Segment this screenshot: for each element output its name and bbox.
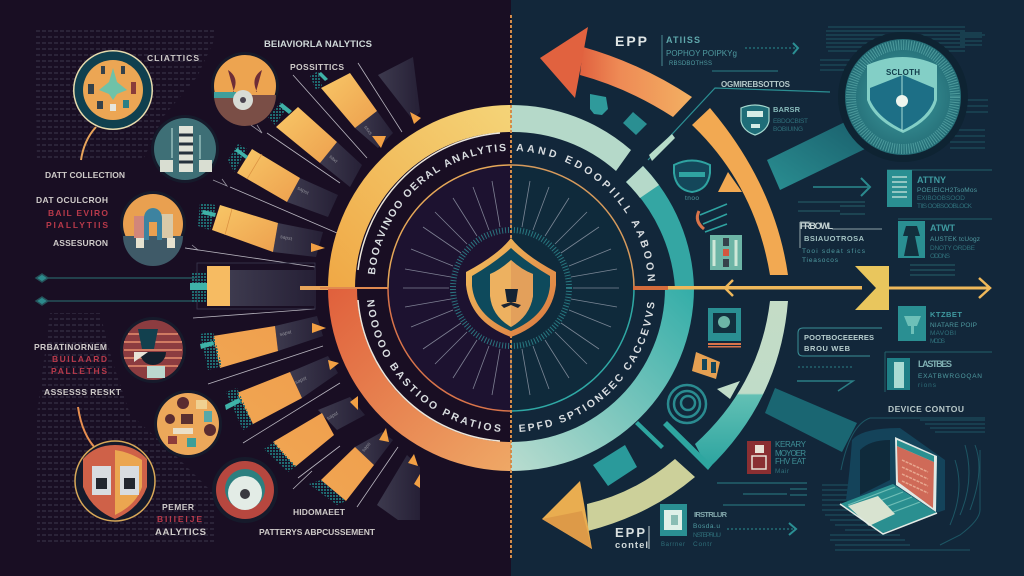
- info card: ktzbet: [898, 306, 977, 345]
- bar: lower 1: [200, 316, 326, 370]
- label block: risk assessment: BUILAARD: [52, 354, 107, 364]
- info card: red: [747, 440, 807, 475]
- label block: data analytics: ASSESURON: [53, 238, 108, 248]
- info card: attny: ATTNY: [917, 175, 946, 185]
- info card: attny: TIIS OOBSOOBLOCK: [917, 203, 973, 210]
- text box: browser: [798, 328, 882, 356]
- badge icon: [741, 105, 769, 135]
- label block: data analytics: [36, 195, 108, 248]
- background left half: [0, 0, 511, 576]
- horizontal ring dividers: [320, 287, 668, 289]
- circle: behavior: [211, 52, 279, 126]
- ring segment top left: [328, 105, 511, 288]
- arc: right pale to teal: [695, 301, 788, 469]
- info card: attny: [887, 170, 992, 210]
- small rule lines: [910, 265, 955, 275]
- left horizontal connector lines: [36, 274, 195, 305]
- bar: upper 1: [310, 71, 393, 148]
- label: hidden pattern: [259, 507, 376, 537]
- info card: lastbes: rions: [918, 382, 937, 389]
- left labels: [34, 39, 376, 538]
- text block: badge: BOBIUING: [773, 126, 803, 133]
- lines lower: [717, 483, 807, 505]
- bar: lower panel: [377, 454, 420, 520]
- ring segment bottom right: [511, 288, 694, 471]
- label block: analytics: AALYTICS: [155, 527, 206, 538]
- text block: install: NSTEPRUU: [693, 532, 721, 539]
- badge label: SCLOTH: [886, 68, 920, 77]
- bar: upper 3: sapst: [296, 185, 310, 197]
- bar: lower 1: sapst: [279, 329, 293, 338]
- tick ring: [453, 230, 569, 346]
- heading: device control: DEVICE CONTOU: [888, 404, 964, 414]
- label block: data analytics: PIALLYTIIS: [46, 220, 108, 230]
- icon: cup: tnoo: [685, 195, 699, 202]
- info card: atwt: ODDNS: [930, 253, 951, 260]
- fan separator lines: [185, 63, 402, 507]
- inner disc left: [388, 165, 511, 411]
- info card: ktzbet: MAVOBI: [930, 330, 956, 337]
- caption: response: EPFD SPTIONEEC CACCEVVS: [519, 302, 654, 432]
- small icons along inner arc: [590, 94, 742, 486]
- notch arrow pale: [717, 381, 740, 399]
- heading: EPP top: EPP: [615, 33, 647, 49]
- icon: document: [660, 504, 687, 548]
- circle: objects: [154, 390, 222, 458]
- arrow bar bottom: [765, 388, 857, 452]
- icon: chip two: [623, 112, 647, 135]
- heading: EPP bottom: [615, 525, 649, 551]
- policy block: POPHOY POIPKYg: [666, 49, 737, 58]
- info card: atwt: AUSTEK tcUogz: [930, 236, 980, 243]
- arrow bar top: [767, 122, 867, 190]
- bar: horizontal: [190, 263, 330, 309]
- bar: lower 3: [264, 396, 365, 472]
- caption: endpoint: AAND EDOOPIILL AABOON: [516, 144, 656, 281]
- info card: ktzbet: NIATARE POIP: [930, 322, 977, 329]
- arc notch arrow orange: [718, 172, 742, 192]
- ring pale cap: [626, 166, 659, 198]
- icon: panel: [710, 235, 742, 270]
- info card: lastbes: [885, 352, 992, 392]
- text block: firewall: FRBOWL: [800, 221, 834, 231]
- text box: browser: POOTBOCEEERES: [804, 333, 874, 342]
- teal accent lines near ring: [635, 88, 830, 470]
- label block: risk assessment: PRBATINORNEM: [34, 342, 107, 352]
- label block: risk assessment: PALLETHS: [51, 366, 107, 376]
- info card: red: KERARY: [775, 440, 807, 449]
- label: hidden pattern: HIDOMAEET: [293, 507, 346, 517]
- text block: firewall: Tooi sdeat sfics: [802, 248, 866, 255]
- caption: behavioral analytics: BOOAVINOO OERAL ANALYTIS: [368, 144, 506, 274]
- info card: red: Mair: [775, 468, 790, 475]
- label block: risk assessment: ASSESSS RESKT: [44, 387, 122, 397]
- circle: red disc: [212, 457, 278, 523]
- text block: install: Bosda.u: [693, 523, 720, 530]
- bar: upper 3: [228, 144, 338, 217]
- label block: analytics: BIIIEIJE: [157, 514, 202, 524]
- label: positics: POSSITTICS: [290, 62, 344, 72]
- heading: behavioral analytics: BEIAVIORLA NALYTICS: [264, 39, 372, 50]
- text block: badge: EBDOCBIST: [773, 118, 808, 125]
- text block: badge: BARSR: [773, 105, 801, 114]
- info card: atwt: DNOTY ORDBE: [930, 245, 976, 252]
- ring inner white edges: [358, 133, 500, 441]
- ring segment top right: [511, 105, 631, 171]
- info card: ktzbet: MOOS: [930, 338, 946, 345]
- icon: document: Barrner: [661, 542, 685, 548]
- central ring: [328, 105, 694, 471]
- info card: atwt: [898, 219, 992, 260]
- icon: crescent lines: [697, 204, 727, 232]
- text block: firewall: Tieasocos: [802, 257, 839, 264]
- policy block: RBSDBOTHSS: [669, 61, 712, 67]
- text block: firewall: [800, 221, 882, 264]
- text block: install: [693, 510, 728, 548]
- arrow: bottom EPP arc: [542, 459, 695, 549]
- text block: install: IRSTRLUR: [694, 510, 728, 519]
- info card: attny: EXIBOOBSOOD: [917, 195, 965, 202]
- policy block: [662, 35, 737, 67]
- label block: data analytics: DAT OCULCROH: [36, 195, 108, 205]
- ring segment bottom left: [328, 288, 511, 471]
- inner disc right: [511, 165, 634, 411]
- top right shield badge: [820, 27, 988, 162]
- caption: practices: NOOOOO BASTIOO PRATIOS: [367, 300, 500, 432]
- circle: shield: [75, 407, 155, 521]
- icon: spiral: [668, 385, 706, 423]
- info card: red: FHV EAT: [775, 457, 806, 466]
- label: data collection: DATT COLLECTION: [45, 170, 125, 180]
- icon: circuit: [593, 445, 637, 486]
- arrow: top EPP arc: [540, 27, 692, 117]
- bar: lower 4: saps: [361, 441, 373, 453]
- dotted line and arrow: [797, 367, 853, 391]
- policy block: ATIISS: [666, 35, 700, 45]
- icon: chip one: [590, 94, 608, 115]
- text box: browser: BROU WEB: [804, 344, 851, 353]
- center dashed line: [510, 15, 512, 560]
- icon: cup: [674, 160, 710, 202]
- arc: right orange: [692, 108, 788, 275]
- label block: analytics: [155, 502, 206, 538]
- text block: badge: [773, 105, 808, 133]
- circle: assessment: [120, 191, 186, 266]
- info card: red: MOYOER: [775, 449, 806, 458]
- dotted arrow bottom: [727, 523, 796, 535]
- label block: risk assessment: [34, 342, 122, 397]
- dot pattern bottom left: [37, 313, 215, 545]
- fan of analytics bars: [185, 57, 421, 520]
- text block: install: Contr: [693, 541, 713, 548]
- bar: upper 2: [268, 102, 362, 187]
- right text blocks: [615, 33, 992, 551]
- central shield: [466, 238, 556, 337]
- icon: screen: [708, 308, 741, 348]
- info card: atwt: ATWT: [930, 223, 956, 233]
- bar: upper 1: ssxs: [362, 125, 373, 137]
- circle: building teal: [151, 115, 219, 183]
- label: hidden pattern: PATTERYS ABPCUSSEMENT: [259, 527, 376, 537]
- heading: EPP bottom: EPP: [615, 525, 645, 540]
- dotted arrow top: [745, 43, 798, 54]
- info card: attny: POEIEICH2TsoMos: [917, 187, 978, 194]
- ring segment right: [626, 166, 694, 288]
- bar: upper panel: [378, 57, 421, 124]
- inner disc gradient border: [388, 165, 634, 411]
- text block: firewall: BSIAUOTROSA: [804, 234, 865, 243]
- circle: stripes: [120, 317, 186, 383]
- bar: upper 2: saxt: [328, 154, 339, 165]
- bar: lower 2: sapst: [294, 375, 308, 386]
- info card: lastbes: LASTBES: [918, 359, 952, 369]
- circle: data collection: [73, 50, 153, 160]
- bar: lower 4: [309, 428, 393, 505]
- bar: upper 4: sapst: [280, 234, 293, 243]
- radial sunburst: [403, 180, 619, 396]
- bar: lower 2: [225, 356, 339, 430]
- laptop illustration: [822, 418, 985, 550]
- dot pattern top left: [35, 28, 215, 160]
- info card: lastbes: EXATBWRGOQAN: [918, 373, 982, 380]
- horizontal orange arrow: [633, 266, 990, 310]
- line above compressors: [712, 70, 778, 72]
- heading: EPP bottom: contel: [615, 540, 648, 551]
- curved ring captions: [367, 144, 656, 432]
- label: clusters: CLIATTICS: [147, 53, 199, 63]
- lines and arrow: [798, 178, 870, 214]
- label block: analytics: PEMER: [162, 502, 194, 512]
- bar: lower 3: sapst: [326, 410, 340, 422]
- icon: orange blocks: [692, 352, 720, 379]
- bar: upper 4: [198, 203, 325, 257]
- label: compressors: OGMIREBSOTTOS: [721, 80, 791, 89]
- background right half: [511, 0, 1024, 576]
- label block: data analytics: BAIL EVIRO: [48, 208, 108, 218]
- info card: ktzbet: KTZBET: [930, 310, 962, 319]
